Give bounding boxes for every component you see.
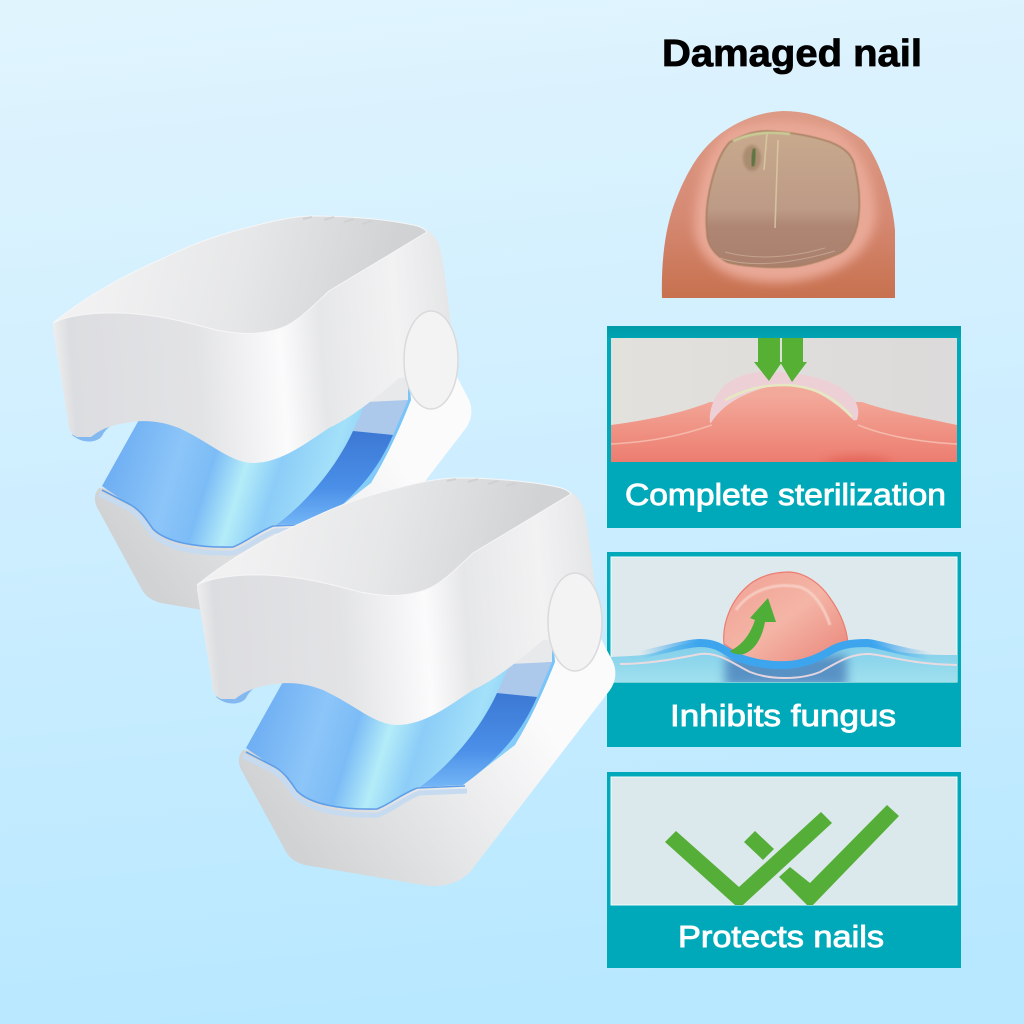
lid blue glow	[72, 418, 122, 442]
second check mark	[779, 805, 899, 905]
fungus illustration	[611, 572, 957, 687]
panel background	[607, 552, 961, 747]
green arrow right	[780, 338, 807, 382]
blue light tray	[102, 378, 411, 546]
vents	[303, 217, 372, 224]
nail edge	[725, 385, 852, 417]
panel top band	[607, 326, 961, 338]
red shading	[826, 454, 890, 462]
green fungus spot	[752, 150, 755, 165]
label: Protects nails	[678, 919, 884, 954]
green arrow left	[754, 338, 782, 381]
pale chamber	[497, 662, 552, 697]
lower lip edge	[246, 752, 465, 809]
illustration backdrop	[611, 557, 957, 682]
finger photo	[611, 372, 957, 462]
panel background	[607, 326, 961, 528]
nail tip discoloration	[733, 133, 790, 141]
panel: protects nails	[607, 772, 961, 968]
nail plate	[706, 131, 859, 267]
finger sides	[611, 402, 957, 462]
blue light tray	[246, 640, 555, 808]
vents	[447, 479, 516, 486]
check mark fragment	[744, 831, 774, 860]
lower lip edge	[102, 490, 321, 547]
toe	[662, 111, 895, 298]
upper lid top	[53, 216, 427, 334]
water	[611, 642, 957, 682]
deep chamber	[276, 431, 393, 525]
nail cap	[710, 372, 858, 423]
water highlight	[620, 654, 957, 678]
pale chamber	[353, 400, 408, 435]
nail ridges	[720, 248, 835, 264]
green curved arrow	[730, 598, 776, 654]
pivot button	[548, 573, 602, 671]
lower shell	[239, 637, 615, 886]
lid blue glow	[216, 680, 266, 704]
label: Complete sterilization	[625, 477, 946, 512]
illustration: damaged toenail	[662, 111, 895, 298]
fingertip	[711, 386, 854, 430]
pivot button	[404, 311, 458, 409]
skin crease	[611, 425, 957, 444]
label: Inhibits fungus	[670, 698, 896, 733]
deep chamber	[420, 693, 537, 787]
nail damage	[764, 133, 778, 228]
fungus shadow	[743, 145, 761, 171]
panel: complete sterilization	[607, 326, 961, 528]
tray rim	[243, 756, 467, 815]
chamber back wall	[512, 636, 552, 665]
photo backdrop	[611, 338, 957, 462]
panel: inhibits fungus	[607, 552, 961, 747]
panel background	[607, 772, 961, 968]
water surface	[640, 643, 930, 665]
lower shell	[95, 375, 471, 624]
skin halo	[695, 121, 876, 282]
upper lid front	[53, 216, 456, 463]
upper lid front	[197, 478, 600, 725]
water shadow	[725, 655, 847, 687]
heading: damaged nail: Damaged nail	[662, 33, 922, 75]
chamber back wall	[368, 374, 408, 403]
dome highlight	[736, 586, 830, 625]
illustration backdrop	[611, 777, 957, 905]
nail dome	[724, 572, 848, 664]
device: front nail lamp	[197, 478, 615, 886]
upper lid top	[197, 478, 571, 596]
first check mark	[665, 812, 832, 905]
device: back nail lamp	[53, 216, 471, 624]
tray rim	[99, 494, 323, 553]
